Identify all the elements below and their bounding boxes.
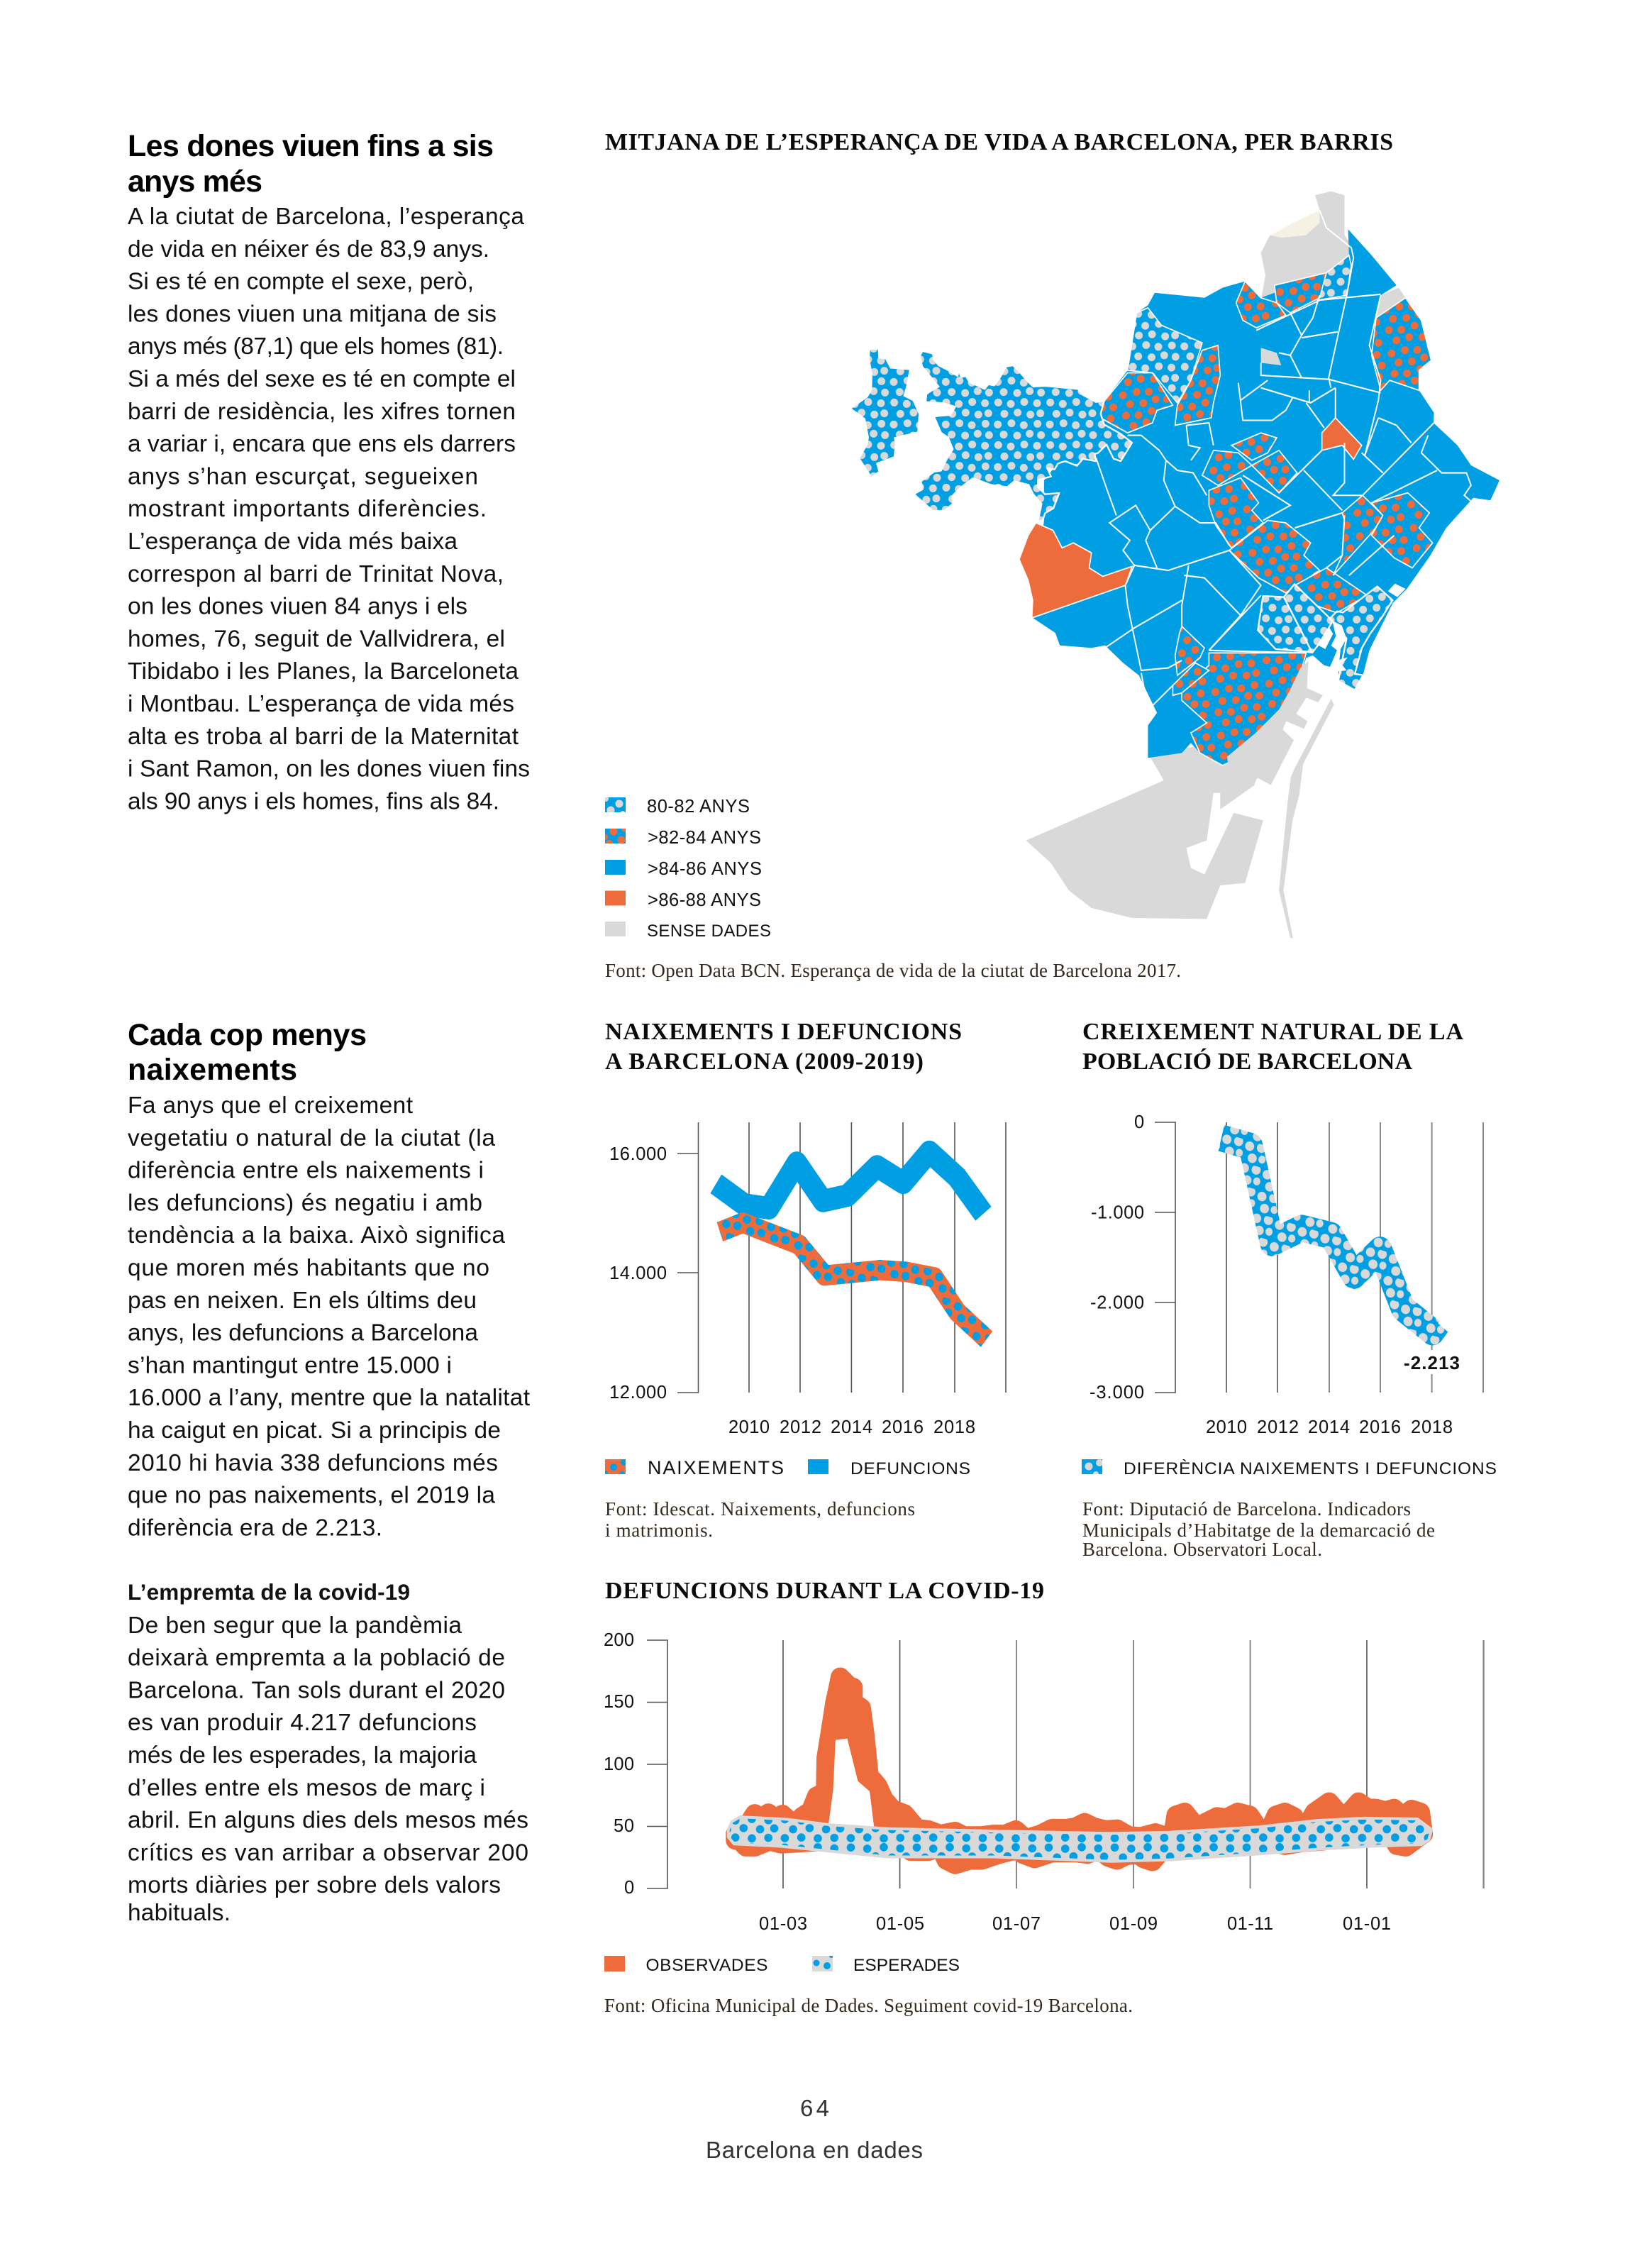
body text: creixement vegetatiu: s’han mantingut entre 15.000 i [128, 1352, 452, 1378]
chart axes and grid [1155, 1122, 1483, 1393]
source [1082, 1498, 1435, 1560]
body text: esperança de vida: anys s’han escurçat, segueixen [128, 463, 478, 489]
heading: les dones viuen fins a sis anys més [128, 129, 494, 199]
axis labels: 50 [614, 1816, 634, 1836]
series: esperades [728, 1817, 1431, 1862]
body text: creixement vegetatiu: diferència era de 2.213. [128, 1515, 382, 1541]
body text: pandèmia: es van produir 4.217 defuncions [128, 1710, 477, 1736]
axis labels: 2012 [780, 1417, 821, 1437]
text block: cada cop menys naixements [128, 1018, 531, 1926]
body text: esperança de vida: L’esperança de vida més baixa [128, 529, 458, 555]
axis labels: 01-07 [992, 1914, 1041, 1934]
body text: creixement vegetatiu: les defuncions) és negatiu i amb [128, 1190, 482, 1216]
axis labels: 0 [624, 1878, 634, 1898]
title: naixements i defuncions [605, 1019, 962, 1075]
body text: esperança de vida: alta es troba al barri de la Maternitat [128, 724, 519, 750]
title: naixements i defuncions: NAIXEMENTS I DEFUNCIONS [605, 1019, 962, 1045]
title: creixement natural [1082, 1019, 1463, 1075]
legend: mapa [605, 797, 771, 941]
source: mapa: Font: Open Data BCN. Esperança de vida de la ciutat de Barcelona 2017. [605, 960, 1181, 981]
body text: creixement vegetatiu: 16.000 a l’any, mentre que la natalitat [128, 1385, 531, 1411]
axis labels: 0 [1134, 1112, 1144, 1132]
body text: pandèmia [128, 1613, 528, 1926]
axis labels: 2018 [1411, 1417, 1453, 1437]
map area: sense dades (SW and north) [1026, 192, 1405, 938]
axis labels [604, 1630, 1391, 1934]
body text: esperança de vida: mostrant importants diferències. [128, 496, 487, 522]
axis labels: 01-03 [759, 1914, 807, 1934]
title: naixements i defuncions: A BARCELONA (2009-2019) [605, 1049, 924, 1075]
map local layers [1019, 192, 1499, 938]
body text: pandèmia: abril. En alguns dies dels mesos més [128, 1808, 528, 1834]
body text: esperança de vida: a variar i, encara que ens els darrers [128, 431, 516, 458]
body text: pandèmia: d’elles entre els mesos de març i [128, 1775, 485, 1801]
page number: 64 [800, 2095, 829, 2121]
legend: diferència: DIFERÈNCIA NAIXEMENTS I DEFUNCIONS [1124, 1459, 1497, 1478]
body text: pandèmia: morts diàries per sobre dels valors [128, 1872, 501, 1898]
axis labels: 150 [604, 1692, 634, 1712]
legend item: 82-84 anys: >82-84 ANYS [648, 828, 761, 848]
body text: esperança de vida: les dones viuen una mitjana de sis [128, 301, 497, 327]
panel: creixement natural [1082, 1019, 1497, 1560]
axis labels: 01-09 [1109, 1914, 1158, 1934]
body text: creixement vegetatiu: que no pas naixements, el 2019 la [128, 1483, 495, 1509]
body text: creixement vegetatiu: diferència entre els naixements i [128, 1158, 484, 1184]
body text: esperança de vida: de vida en néixer és de 83,9 anys. [128, 236, 489, 262]
axis labels: -3.000 [1090, 1383, 1144, 1403]
body text: pandèmia: habituals. [128, 1900, 231, 1926]
port gray [1227, 661, 1334, 796]
body text: creixement vegetatiu [128, 1092, 531, 1541]
title: creixement natural: POBLACIÓ DE BARCELONA [1082, 1048, 1412, 1075]
map: esperança de vida per barris [852, 192, 1499, 938]
body text: creixement vegetatiu: 2010 hi havia 338 defuncions més [128, 1450, 498, 1476]
axis labels: 01-05 [876, 1914, 924, 1934]
line: defuncions [716, 1152, 983, 1214]
map area: collserola 80-82 anys [852, 346, 1132, 521]
source: Font: Idescat. Naixements, defuncions [605, 1498, 915, 1520]
legend item: 80-82 anys: 80-82 ANYS [647, 797, 750, 817]
body text: creixement vegetatiu: que moren més habitants que no [128, 1255, 489, 1281]
legend: defuncions: DEFUNCIONS [850, 1459, 970, 1478]
map area: blue districts [1033, 229, 1499, 765]
series: observades [736, 1677, 1424, 1864]
axis labels: 2016 [882, 1417, 924, 1437]
body text: pandèmia: deixarà empremta a la població de [128, 1645, 505, 1671]
body text: creixement vegetatiu: pas en neixen. En els últims deu [128, 1288, 477, 1314]
legend item: 84-86 anys: >84-86 ANYS [648, 859, 762, 879]
map area: beige [1270, 210, 1319, 238]
map areas: 82-84 anys [1101, 273, 1433, 765]
body text: creixement vegetatiu: vegetatiu o natural de la ciutat (la [128, 1125, 495, 1151]
body text: esperança de vida: Tibidabo i les Planes, la Barceloneta [128, 658, 519, 685]
axis labels: -1.000 [1091, 1203, 1144, 1223]
east barris 80-82 anys [1258, 584, 1392, 690]
body text: creixement vegetatiu: Fa anys que el creixement [128, 1092, 414, 1119]
heading: cada cop menys naixements [128, 1018, 367, 1087]
body text: esperança de vida: i Montbau. L’esperança de vida més [128, 691, 514, 717]
map areas: 86-88 anys [1019, 418, 1362, 618]
body text: esperança de vida: on les dones viuen 84 anys i els [128, 594, 467, 620]
map area: gray zones inside [1261, 348, 1281, 365]
body text: esperança de vida: A la ciutat de Barcelona, l’esperança [128, 204, 524, 230]
axis labels: 01-11 [1227, 1914, 1273, 1934]
body text: creixement vegetatiu: tendència a la baixa. Això significa [128, 1222, 505, 1249]
panel: naixements i defuncions [605, 1019, 1006, 1541]
axis labels: 2012 [1257, 1417, 1299, 1437]
axis labels: 200 [604, 1630, 634, 1650]
axis labels: 2014 [831, 1417, 872, 1437]
axis labels: 2010 [728, 1417, 770, 1437]
footer [706, 2095, 923, 2163]
legend: naixements: NAIXEMENTS [648, 1457, 784, 1478]
panel: defuncions durant la covid-19 [604, 1578, 1484, 2016]
legend: esperades: ESPERADES [853, 1956, 960, 1975]
axis labels: 12.000 [609, 1383, 667, 1403]
body text: esperança de vida: anys més (87,1) que els homes (81). [128, 333, 504, 360]
text block: les dones viuen [128, 129, 530, 814]
source: i matrimonis. [605, 1520, 713, 1541]
axis labels: 2014 [1308, 1417, 1350, 1437]
body text: esperança de vida: barri de residència, les xifres tornen [128, 399, 516, 425]
axis labels: 01-01 [1343, 1914, 1391, 1934]
body text: esperança de vida: Si a més del sexe es té en compte el [128, 366, 516, 392]
source: Municipals d’Habitatge de la demarcació de [1082, 1520, 1435, 1541]
map areas: 80-82 anys [1128, 255, 1351, 403]
body text: esperança de vida: i Sant Ramon, on les dones viuen fins [128, 756, 530, 782]
title: covid: DEFUNCIONS DURANT LA COVID-19 [605, 1578, 1044, 1604]
legend item: 86-88 anys: >86-88 ANYS [648, 890, 761, 910]
body text: pandèmia: més de les esperades, la majoria [128, 1742, 477, 1769]
axis labels [609, 1144, 975, 1437]
chart axes and grid [647, 1640, 1484, 1888]
axis labels: -2.000 [1090, 1293, 1144, 1313]
legend item: sense dades: SENSE DADES [647, 922, 771, 941]
heading: les dones viuen fins a sis anys més: anys més [128, 165, 262, 199]
axis labels: 2016 [1359, 1417, 1401, 1437]
body text: esperança de vida: correspon al barri de Trinitat Nova, [128, 561, 504, 587]
body text: esperança de vida [128, 204, 530, 814]
map district borders [1096, 210, 1475, 708]
line: naixements [720, 1223, 987, 1339]
legend: observades: OBSERVADES [645, 1956, 767, 1975]
subheading: l'empremta de la covid-19: L’empremta de la covid-19 [128, 1579, 410, 1605]
body text: pandèmia: De ben segur que la pandèmia [128, 1613, 462, 1639]
title: creixement natural: CREIXEMENT NATURAL DE LA [1082, 1019, 1463, 1045]
heading: cada cop menys naixements: naixements [128, 1053, 297, 1087]
axis labels: 100 [604, 1754, 634, 1774]
body text: creixement vegetatiu: anys, les defuncions a Barcelona [128, 1320, 478, 1346]
body text: esperança de vida: als 90 anys i els homes, fins als 84. [128, 788, 499, 814]
source: Font: Oficina Municipal de Dades. Seguiment covid-19 Barcelona. [604, 1995, 1133, 2016]
axis labels [1090, 1112, 1453, 1437]
callout: -2.213: -2.213 [1404, 1352, 1460, 1373]
source: Barcelona. Observatori Local. [1082, 1539, 1322, 1560]
body text: esperança de vida: Si es té en compte el sexe, però, [128, 269, 474, 295]
line: diferència naixements i defuncions [1221, 1138, 1438, 1332]
axis labels: 2018 [933, 1417, 975, 1437]
port piers white [1307, 584, 1406, 699]
heading: les dones viuen fins a sis anys més: Les dones viuen fins a sis [128, 129, 494, 163]
body text: pandèmia: Barcelona. Tan sols durant el 2020 [128, 1677, 505, 1703]
heading: cada cop menys naixements: Cada cop menys [128, 1018, 367, 1052]
chart axes and grid [677, 1122, 1006, 1393]
body text: creixement vegetatiu: ha caigut en picat. Si a principis de [128, 1417, 501, 1444]
axis labels: 2010 [1206, 1417, 1247, 1437]
axis labels: 16.000 [609, 1144, 667, 1164]
body text: pandèmia: crítics es van arribar a observar 200 [128, 1840, 528, 1866]
title: mapa esperança de vida: MITJANA DE L’ESPERANÇA DE VIDA A BARCELONA, PER BARRIS [605, 129, 1393, 155]
axis labels: 14.000 [609, 1263, 667, 1283]
map area: port and east coast [1227, 584, 1406, 796]
source: Font: Diputació de Barcelona. Indicadors [1082, 1498, 1411, 1520]
source [605, 1498, 915, 1541]
publication name: Barcelona en dades [706, 2137, 923, 2163]
body text: esperança de vida: homes, 76, seguit de Vallvidrera, el [128, 626, 505, 652]
